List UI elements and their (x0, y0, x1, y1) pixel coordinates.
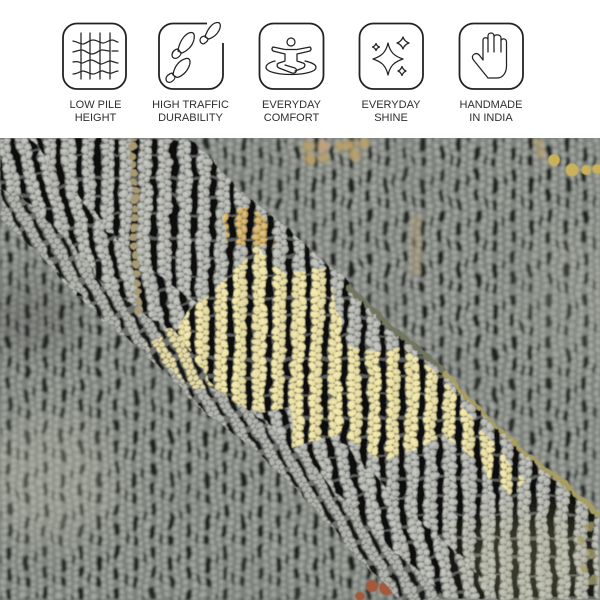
tan column (132, 138, 139, 315)
yellow knots, top right (548, 154, 600, 176)
label: high traffic durability: DURABILITY (158, 112, 224, 124)
dark top edge of roll (350, 288, 440, 368)
label: low pile height: HEIGHT (75, 112, 117, 124)
label: everyday comfort: EVERYDAY (262, 99, 322, 111)
icon: everyday shine (360, 24, 423, 89)
olive edge of roll (440, 368, 600, 513)
icon: everyday comfort (260, 24, 324, 89)
gray pile at lower edge (0, 190, 447, 600)
label: everyday shine: SHINE (374, 112, 408, 124)
label: everyday comfort: COMFORT (264, 112, 319, 124)
label: low pile height: LOW PILE (70, 99, 121, 111)
icon: handmade in india (460, 24, 523, 89)
rug surface background (0, 138, 600, 600)
gray pile tilted band (0, 138, 501, 600)
photo: rolled rug close-up (0, 138, 600, 600)
gray striped pile (0, 138, 600, 600)
tan motif, top edge (302, 138, 546, 275)
yellow pile at lower edge (145, 328, 215, 392)
label: handmade in india: HANDMADE (460, 99, 522, 111)
tan pile patch (222, 204, 274, 248)
icon: low pile height (63, 24, 126, 89)
orange motif, bottom edge (355, 580, 395, 600)
label: handmade in india: IN INDIA (469, 112, 513, 124)
warm tint at right end of roll (460, 510, 600, 600)
yellow pile motif (170, 247, 525, 498)
label: high traffic durability: HIGH TRAFFIC (152, 99, 229, 111)
label: everyday shine: EVERYDAY (362, 99, 421, 111)
rolled rug (0, 138, 600, 600)
icon: high traffic durability (159, 20, 225, 89)
base under roll edges (420, 590, 600, 600)
